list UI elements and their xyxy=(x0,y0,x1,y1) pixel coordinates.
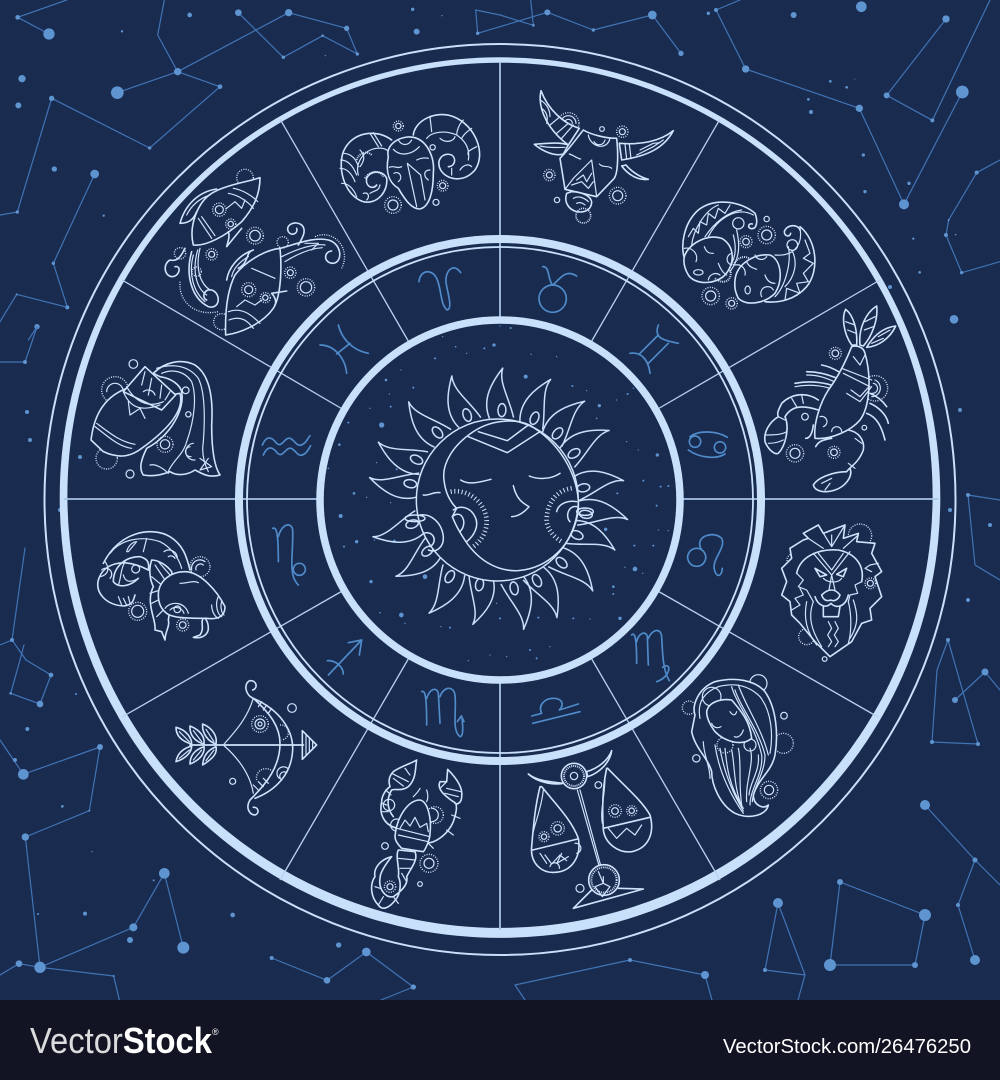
glyph: Aquarius xyxy=(262,436,311,455)
illustration: Leo lion xyxy=(782,524,882,661)
constellations: bottom and right side xyxy=(515,285,1000,1000)
glyph: Scorpio xyxy=(422,688,464,737)
star field in the centre disc xyxy=(327,325,669,661)
illustration: Aries ram xyxy=(340,115,480,213)
illustration: Pisces fish xyxy=(165,169,344,335)
sun and crescent moon face xyxy=(405,419,593,581)
middle ring xyxy=(239,239,761,761)
illustration: Cancer crab xyxy=(765,306,896,492)
glyph: Libra xyxy=(532,698,580,723)
illustration: Taurus bull xyxy=(534,91,673,223)
zodiac glyph ring xyxy=(262,267,727,737)
glyph: Leo xyxy=(688,535,723,575)
glyph: Aries xyxy=(419,268,461,310)
glyph: Capricorn xyxy=(273,525,305,585)
image id: VectorStock.com/26476250 xyxy=(723,1036,971,1058)
illustration: Aquarius water jar xyxy=(91,360,220,478)
glyph: Cancer xyxy=(688,432,727,457)
sun rays xyxy=(367,367,630,632)
VectorStock logo: VectorStock xyxy=(30,1020,213,1061)
glyph: Virgo xyxy=(632,630,669,682)
twelve sector spokes xyxy=(64,62,938,930)
illustration: Sagittarius bow and arrow xyxy=(176,681,317,815)
footer bar xyxy=(0,1000,1000,1080)
constellations: bottom left xyxy=(0,660,416,1000)
glyph: Pisces xyxy=(320,325,368,373)
registered mark: ® xyxy=(212,1027,219,1037)
constellations: top right xyxy=(500,0,1000,324)
glyph: Sagittarius xyxy=(327,640,362,675)
inner ring xyxy=(320,320,680,680)
illustration: Gemini twins xyxy=(683,202,815,309)
outer wheel: thick ring xyxy=(60,57,940,938)
illustration: Scorpio scorpion xyxy=(372,760,462,908)
illustration: Capricorn sea goat xyxy=(98,532,225,640)
glyph: Gemini xyxy=(630,325,678,373)
constellations: top left xyxy=(0,0,500,340)
illustration: Virgo maiden xyxy=(682,675,793,816)
outer wheel: thin ring xyxy=(44,44,956,955)
constellations: left side xyxy=(0,327,82,762)
glyph: Taurus xyxy=(539,267,577,312)
illustration: Libra scales xyxy=(528,751,652,908)
